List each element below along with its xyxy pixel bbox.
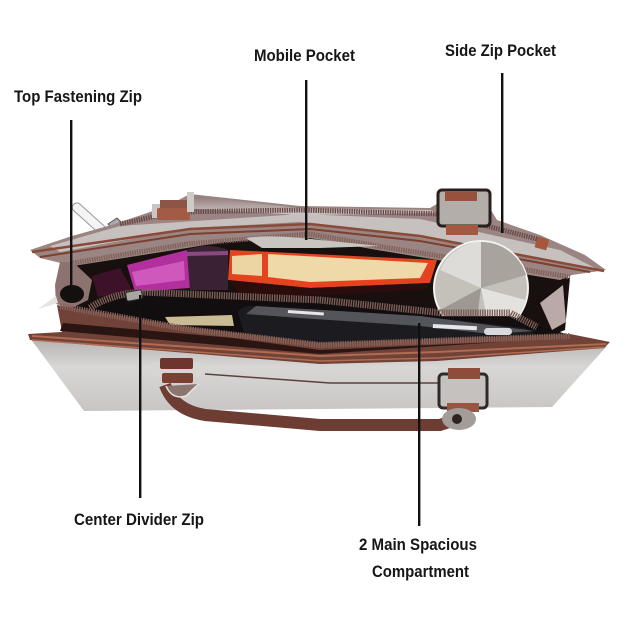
label: mobile pocket: Mobile Pocket bbox=[254, 46, 355, 65]
cream pen item bbox=[165, 315, 234, 326]
back handle buckles bbox=[152, 190, 490, 235]
center divider zip bbox=[90, 292, 537, 327]
back zipper pull bbox=[71, 201, 122, 241]
center zip pull bbox=[125, 290, 143, 301]
label: 2 main spacious compartment: Compartment bbox=[372, 562, 469, 581]
label: top fastening zip: Top Fastening Zip bbox=[14, 87, 142, 106]
front compartment interior bbox=[75, 295, 570, 344]
steel flask lid bbox=[434, 241, 528, 335]
phone held above book bbox=[246, 236, 380, 248]
pointer line: main compartment bbox=[418, 323, 420, 526]
interior of the bag bbox=[60, 235, 570, 340]
front flap stripes and zip bbox=[28, 305, 610, 364]
left front buckle bbox=[153, 358, 201, 397]
right side gusset bbox=[540, 285, 566, 330]
pink food container bbox=[127, 250, 190, 292]
label: side zip pocket: Side Zip Pocket bbox=[445, 41, 556, 60]
front handle bbox=[165, 385, 455, 425]
label: 2 main spacious compartment: 2 Main Spacious bbox=[359, 535, 477, 554]
label: 2 main spacious compartment bbox=[359, 535, 477, 581]
label: center divider zip: Center Divider Zip bbox=[74, 510, 204, 529]
pointer line: center divider zip bbox=[139, 295, 141, 498]
bag bbox=[28, 190, 610, 430]
pointer line: side zip pocket bbox=[501, 73, 503, 233]
tablet phone bbox=[238, 306, 535, 344]
front panel body bbox=[30, 338, 607, 411]
pointer line: mobile pocket bbox=[305, 80, 307, 240]
book bbox=[228, 250, 437, 296]
back panel with zip bbox=[30, 190, 606, 280]
pointer line: top fastening zip bbox=[70, 120, 72, 290]
front panel crease line bbox=[205, 374, 440, 383]
left dark pink item bbox=[92, 268, 132, 297]
left end gusset with zip pull bbox=[38, 262, 92, 309]
right front buckle bbox=[439, 368, 487, 430]
side zip pocket tab bbox=[535, 237, 549, 250]
glass jar bbox=[187, 246, 228, 290]
